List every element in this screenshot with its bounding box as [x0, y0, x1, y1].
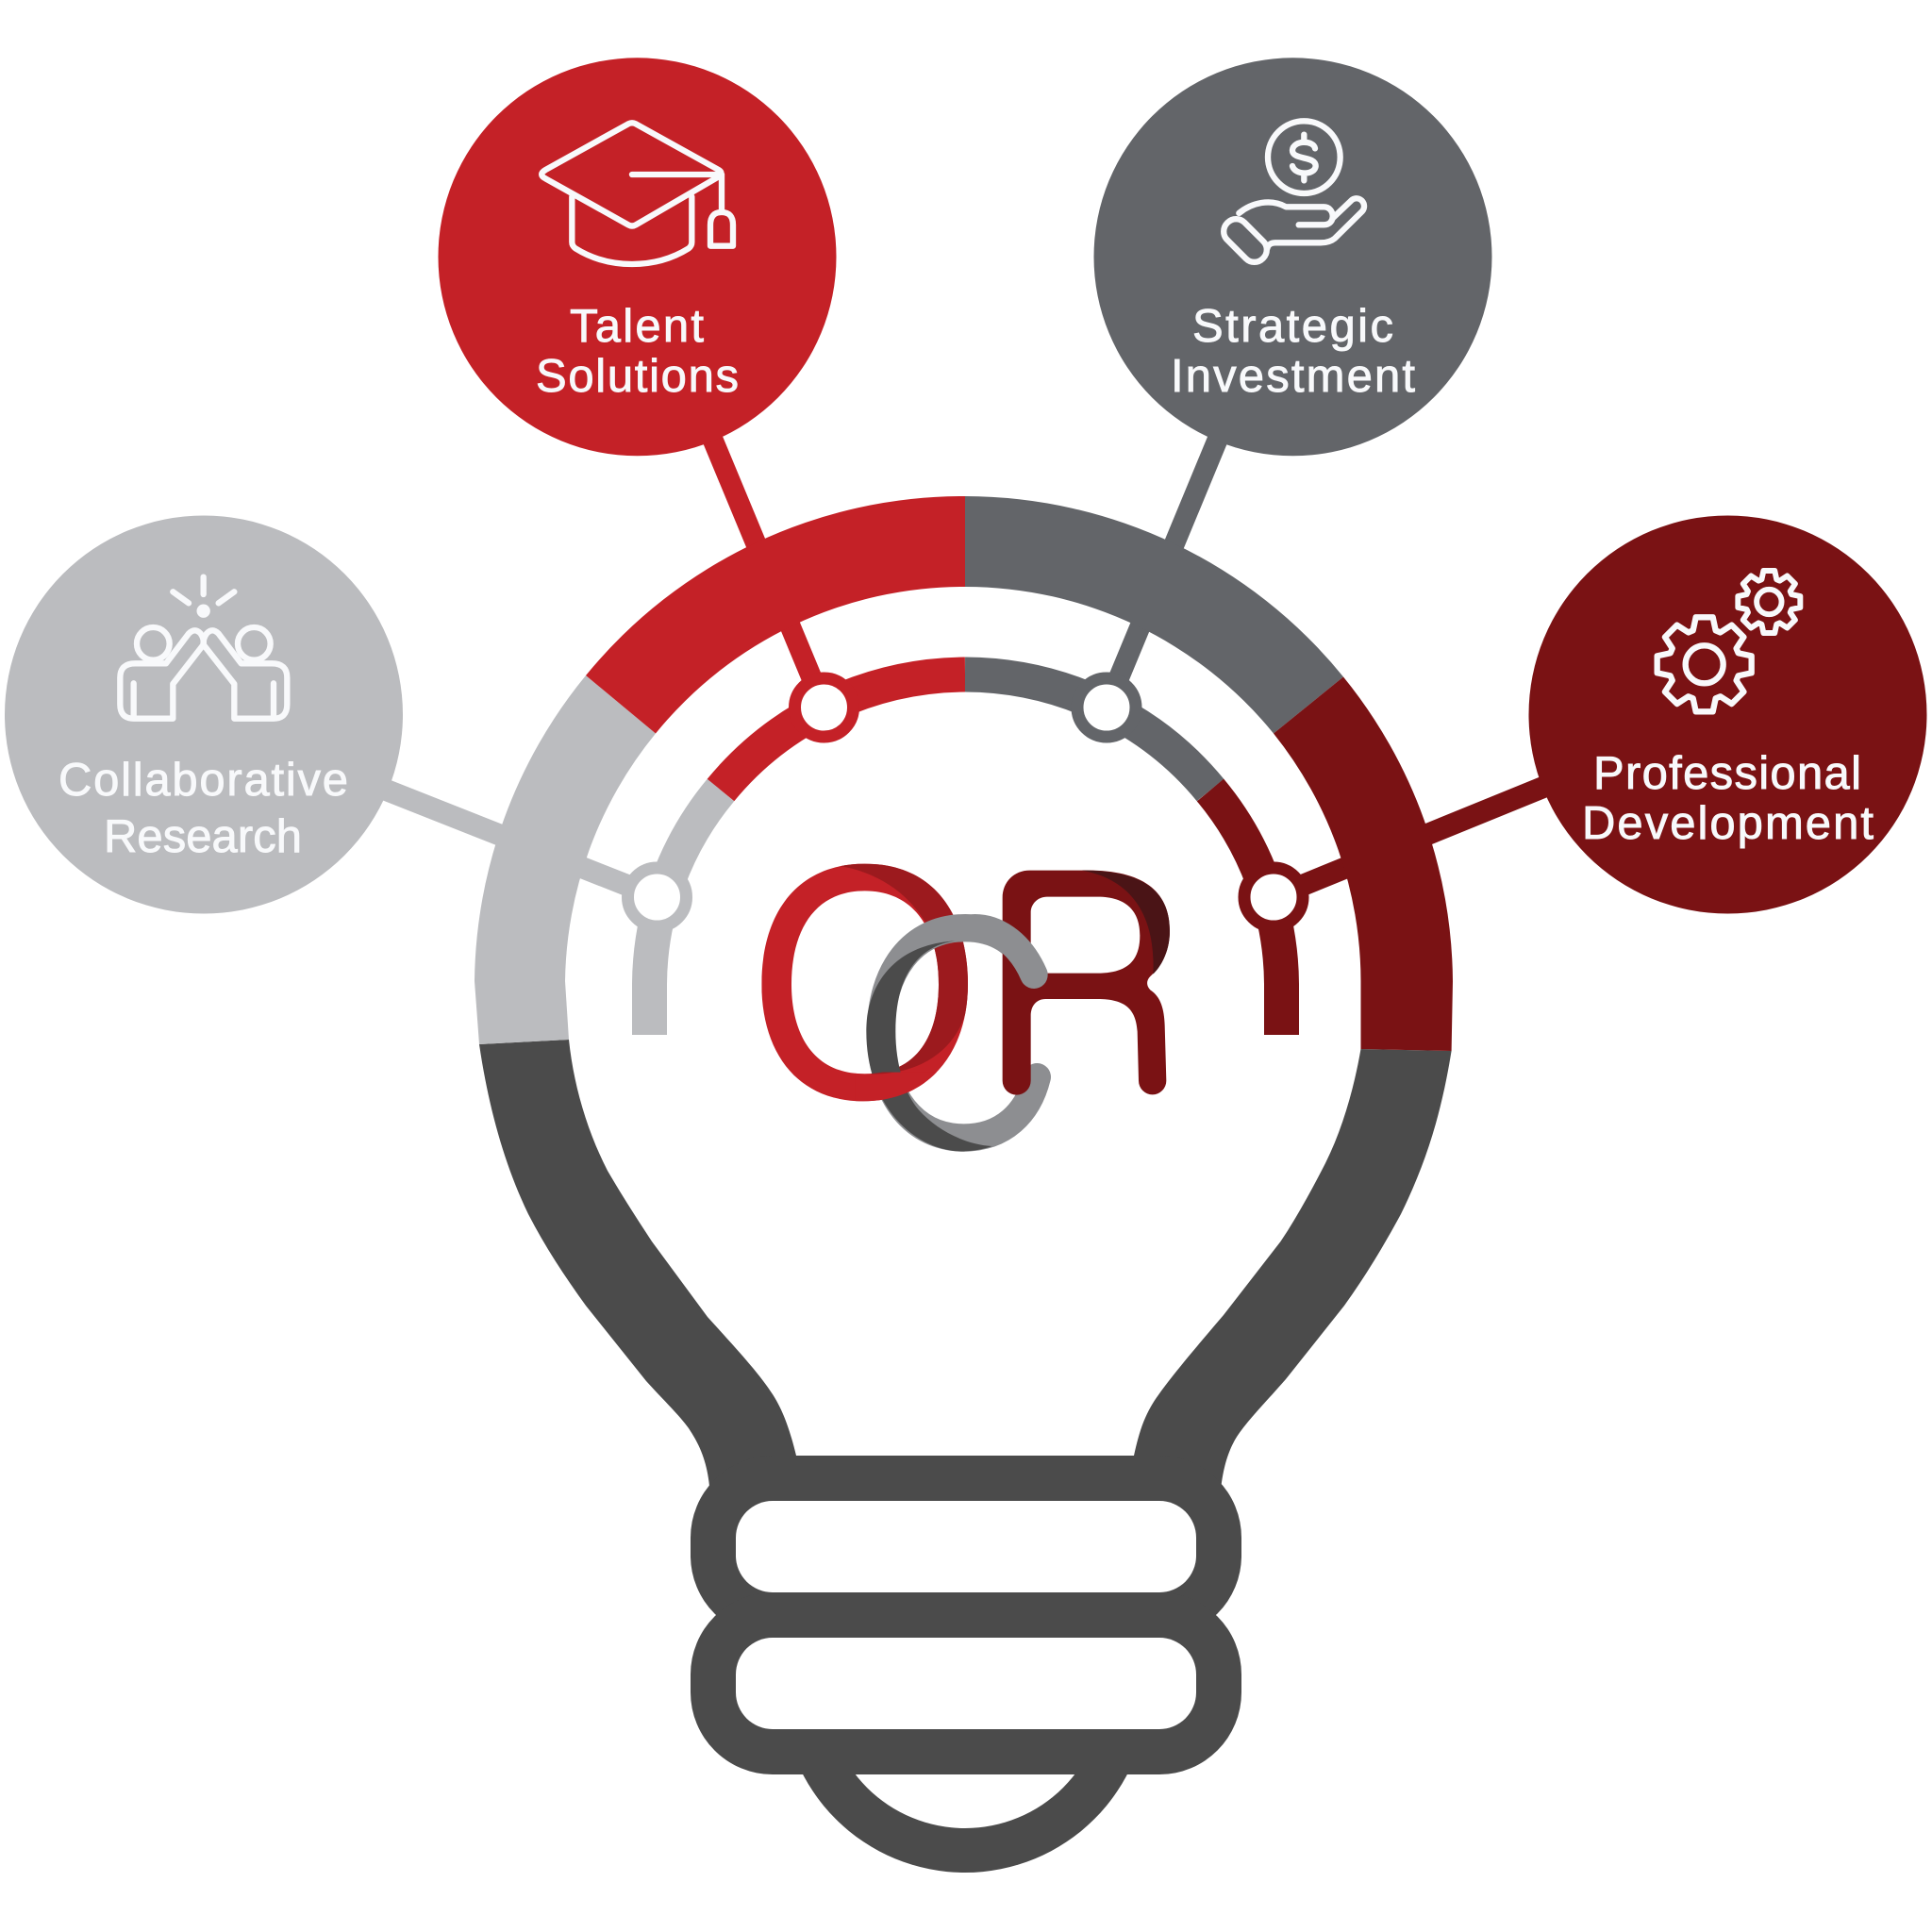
circle background — [438, 58, 836, 456]
logo letter C — [866, 928, 1037, 1152]
node: professional — [1244, 868, 1303, 926]
logo: OCR monogram — [755, 849, 1170, 1152]
node: collaborative — [628, 868, 687, 926]
icon: graduation cap — [541, 123, 733, 264]
inner arc: strategic segment — [965, 675, 1210, 791]
node: talent — [794, 678, 853, 737]
label: Talent — [570, 301, 704, 352]
label: Professional — [1593, 748, 1861, 799]
inner arc: professional segment — [1210, 791, 1281, 1035]
lightbulb: dark lower glass and base — [479, 1040, 1452, 1873]
logo letter O — [761, 864, 968, 1102]
label line 2: Research — [104, 811, 302, 862]
label line 2: Solutions — [536, 351, 739, 402]
label: Strategic — [1192, 301, 1393, 352]
node: strategic — [1077, 678, 1136, 737]
logo letter C top overlap — [974, 928, 1034, 974]
label line 2: Investment — [1171, 351, 1415, 402]
connector: professional development — [1274, 712, 1727, 897]
outer arc: collaborative segment — [475, 675, 656, 1044]
panel: collaborative research — [5, 515, 403, 913]
logo letter O overlap — [855, 1072, 937, 1102]
outer arc: talent segment — [586, 496, 965, 734]
icon: gears — [1657, 571, 1800, 711]
panel: strategic investment — [1094, 58, 1492, 456]
icon: high five — [120, 577, 287, 719]
logo letter R — [1003, 871, 1170, 1095]
label: Collaborative — [58, 755, 348, 806]
outer arc: professional segment — [1274, 677, 1453, 1051]
circle background — [1528, 515, 1926, 913]
icon: hand holding coin — [1219, 121, 1364, 267]
label line 2: Development — [1582, 798, 1874, 849]
inner arc: collaborative segment — [649, 791, 721, 1035]
circle background — [1094, 58, 1492, 456]
connector: talent solutions — [637, 257, 824, 708]
connector: strategic investment — [1107, 257, 1293, 708]
panel: talent solutions — [438, 58, 836, 456]
outer arc: strategic segment — [965, 496, 1343, 734]
panel: professional development — [1528, 515, 1926, 913]
inner arc: talent segment — [721, 675, 965, 791]
circle background — [5, 515, 403, 913]
connector: collaborative research — [204, 718, 657, 897]
